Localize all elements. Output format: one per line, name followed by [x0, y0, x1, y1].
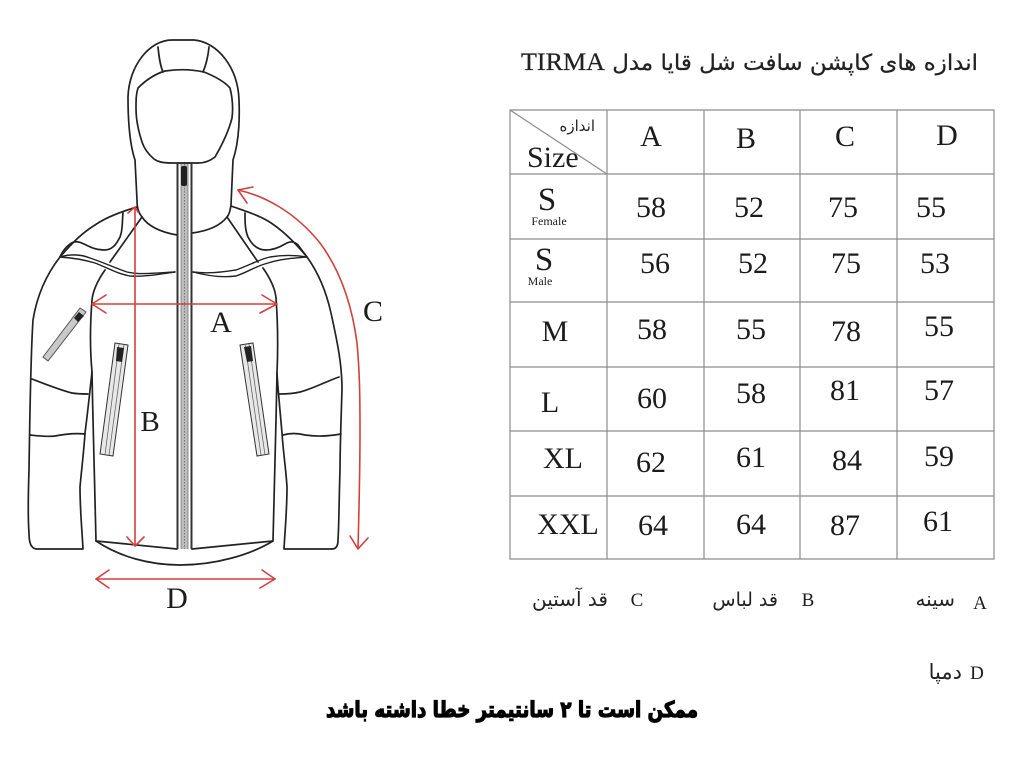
row XXL values: 87 [830, 509, 860, 542]
row labels: Male [528, 274, 552, 288]
left pocket zipper [100, 343, 128, 456]
row XL values: 62 [636, 446, 666, 479]
legend B: garment length: قد لباس [712, 589, 778, 611]
row S male values: 52 [738, 247, 768, 280]
row S male values [640, 247, 950, 280]
row XXL values: 64 [638, 509, 668, 542]
legend D: hem: D [970, 663, 984, 684]
row labels: Female [531, 214, 567, 228]
arrow A: chest width [92, 295, 277, 313]
row labels: S [535, 242, 553, 278]
table grid [510, 110, 994, 559]
right pocket zipper [240, 343, 269, 456]
row S male values: 56 [640, 247, 670, 280]
row L values: 60 [637, 382, 667, 415]
sleeve pocket zipper [43, 308, 86, 361]
tolerance note: ممکن است تا ۲ سانتیمتر خطا داشته باشد [326, 698, 698, 723]
jacket technical drawing [28, 40, 342, 565]
centre zipper [177, 163, 192, 549]
label B: B [140, 406, 160, 438]
arrow C: sleeve length [238, 187, 368, 549]
row XL values: 59 [924, 440, 954, 473]
arrow D: hem width [96, 570, 275, 588]
row L values: 81 [830, 374, 860, 407]
column headers [640, 119, 958, 155]
row XL values: 61 [736, 441, 766, 474]
column headers: D [936, 119, 958, 152]
legend D: hem: دمپا [929, 660, 962, 684]
row M values: 78 [831, 315, 861, 348]
row S male values: 53 [920, 247, 950, 280]
row S female values: 55 [916, 191, 946, 224]
arrow B: garment length [127, 207, 144, 546]
label D: D [166, 582, 188, 615]
column headers: A [640, 120, 662, 153]
row S female values: 58 [636, 191, 666, 224]
size table [510, 110, 994, 559]
legend B: garment length: B [802, 590, 814, 611]
label C: C [363, 295, 383, 328]
row labels: M [542, 315, 568, 348]
row XL values: 84 [832, 444, 862, 477]
row labels: S [538, 182, 556, 218]
row S male values: 75 [831, 247, 861, 280]
legend D: hem [929, 660, 984, 684]
legend [532, 586, 987, 684]
row L values [637, 374, 954, 415]
header corner [527, 117, 595, 174]
jacket body [90, 217, 278, 565]
row XL values [636, 440, 954, 479]
row XXL values: 64 [736, 508, 766, 541]
row M values: 58 [637, 313, 667, 346]
row L values: 58 [736, 377, 766, 410]
row labels: XL [543, 442, 583, 475]
column headers: C [835, 120, 855, 153]
row S female values [636, 191, 946, 224]
header corner: اندازه [560, 117, 595, 135]
left sleeve and shoulder [28, 207, 137, 549]
legend C: sleeve length: C [631, 590, 643, 611]
legend A: chest [915, 587, 987, 614]
row M values: 55 [736, 313, 766, 346]
row labels: L [541, 386, 559, 419]
row L values: 57 [924, 374, 954, 407]
row M values: 55 [924, 310, 954, 343]
legend A: chest: A [973, 593, 987, 614]
title: اندازه های کاپشن سافت شل قایا مدل TIRMA [521, 49, 978, 76]
label A: A [210, 306, 232, 339]
legend B: garment length [712, 589, 814, 611]
row labels: XXL [537, 508, 599, 541]
row S female values: 52 [734, 191, 764, 224]
hood [128, 40, 239, 235]
header corner: Size [527, 141, 579, 174]
row M values [637, 310, 954, 348]
row XXL values: 61 [923, 505, 953, 538]
legend C: sleeve length [532, 586, 643, 611]
row S female values: 75 [828, 191, 858, 224]
shoulder yoke bands [60, 255, 307, 277]
row labels [528, 182, 599, 541]
right sleeve and shoulder [231, 206, 342, 549]
row XXL values [638, 505, 953, 542]
legend C: sleeve length: قد آستین [532, 586, 608, 611]
column headers: B [736, 122, 756, 155]
legend A: chest: سینه [915, 587, 955, 611]
